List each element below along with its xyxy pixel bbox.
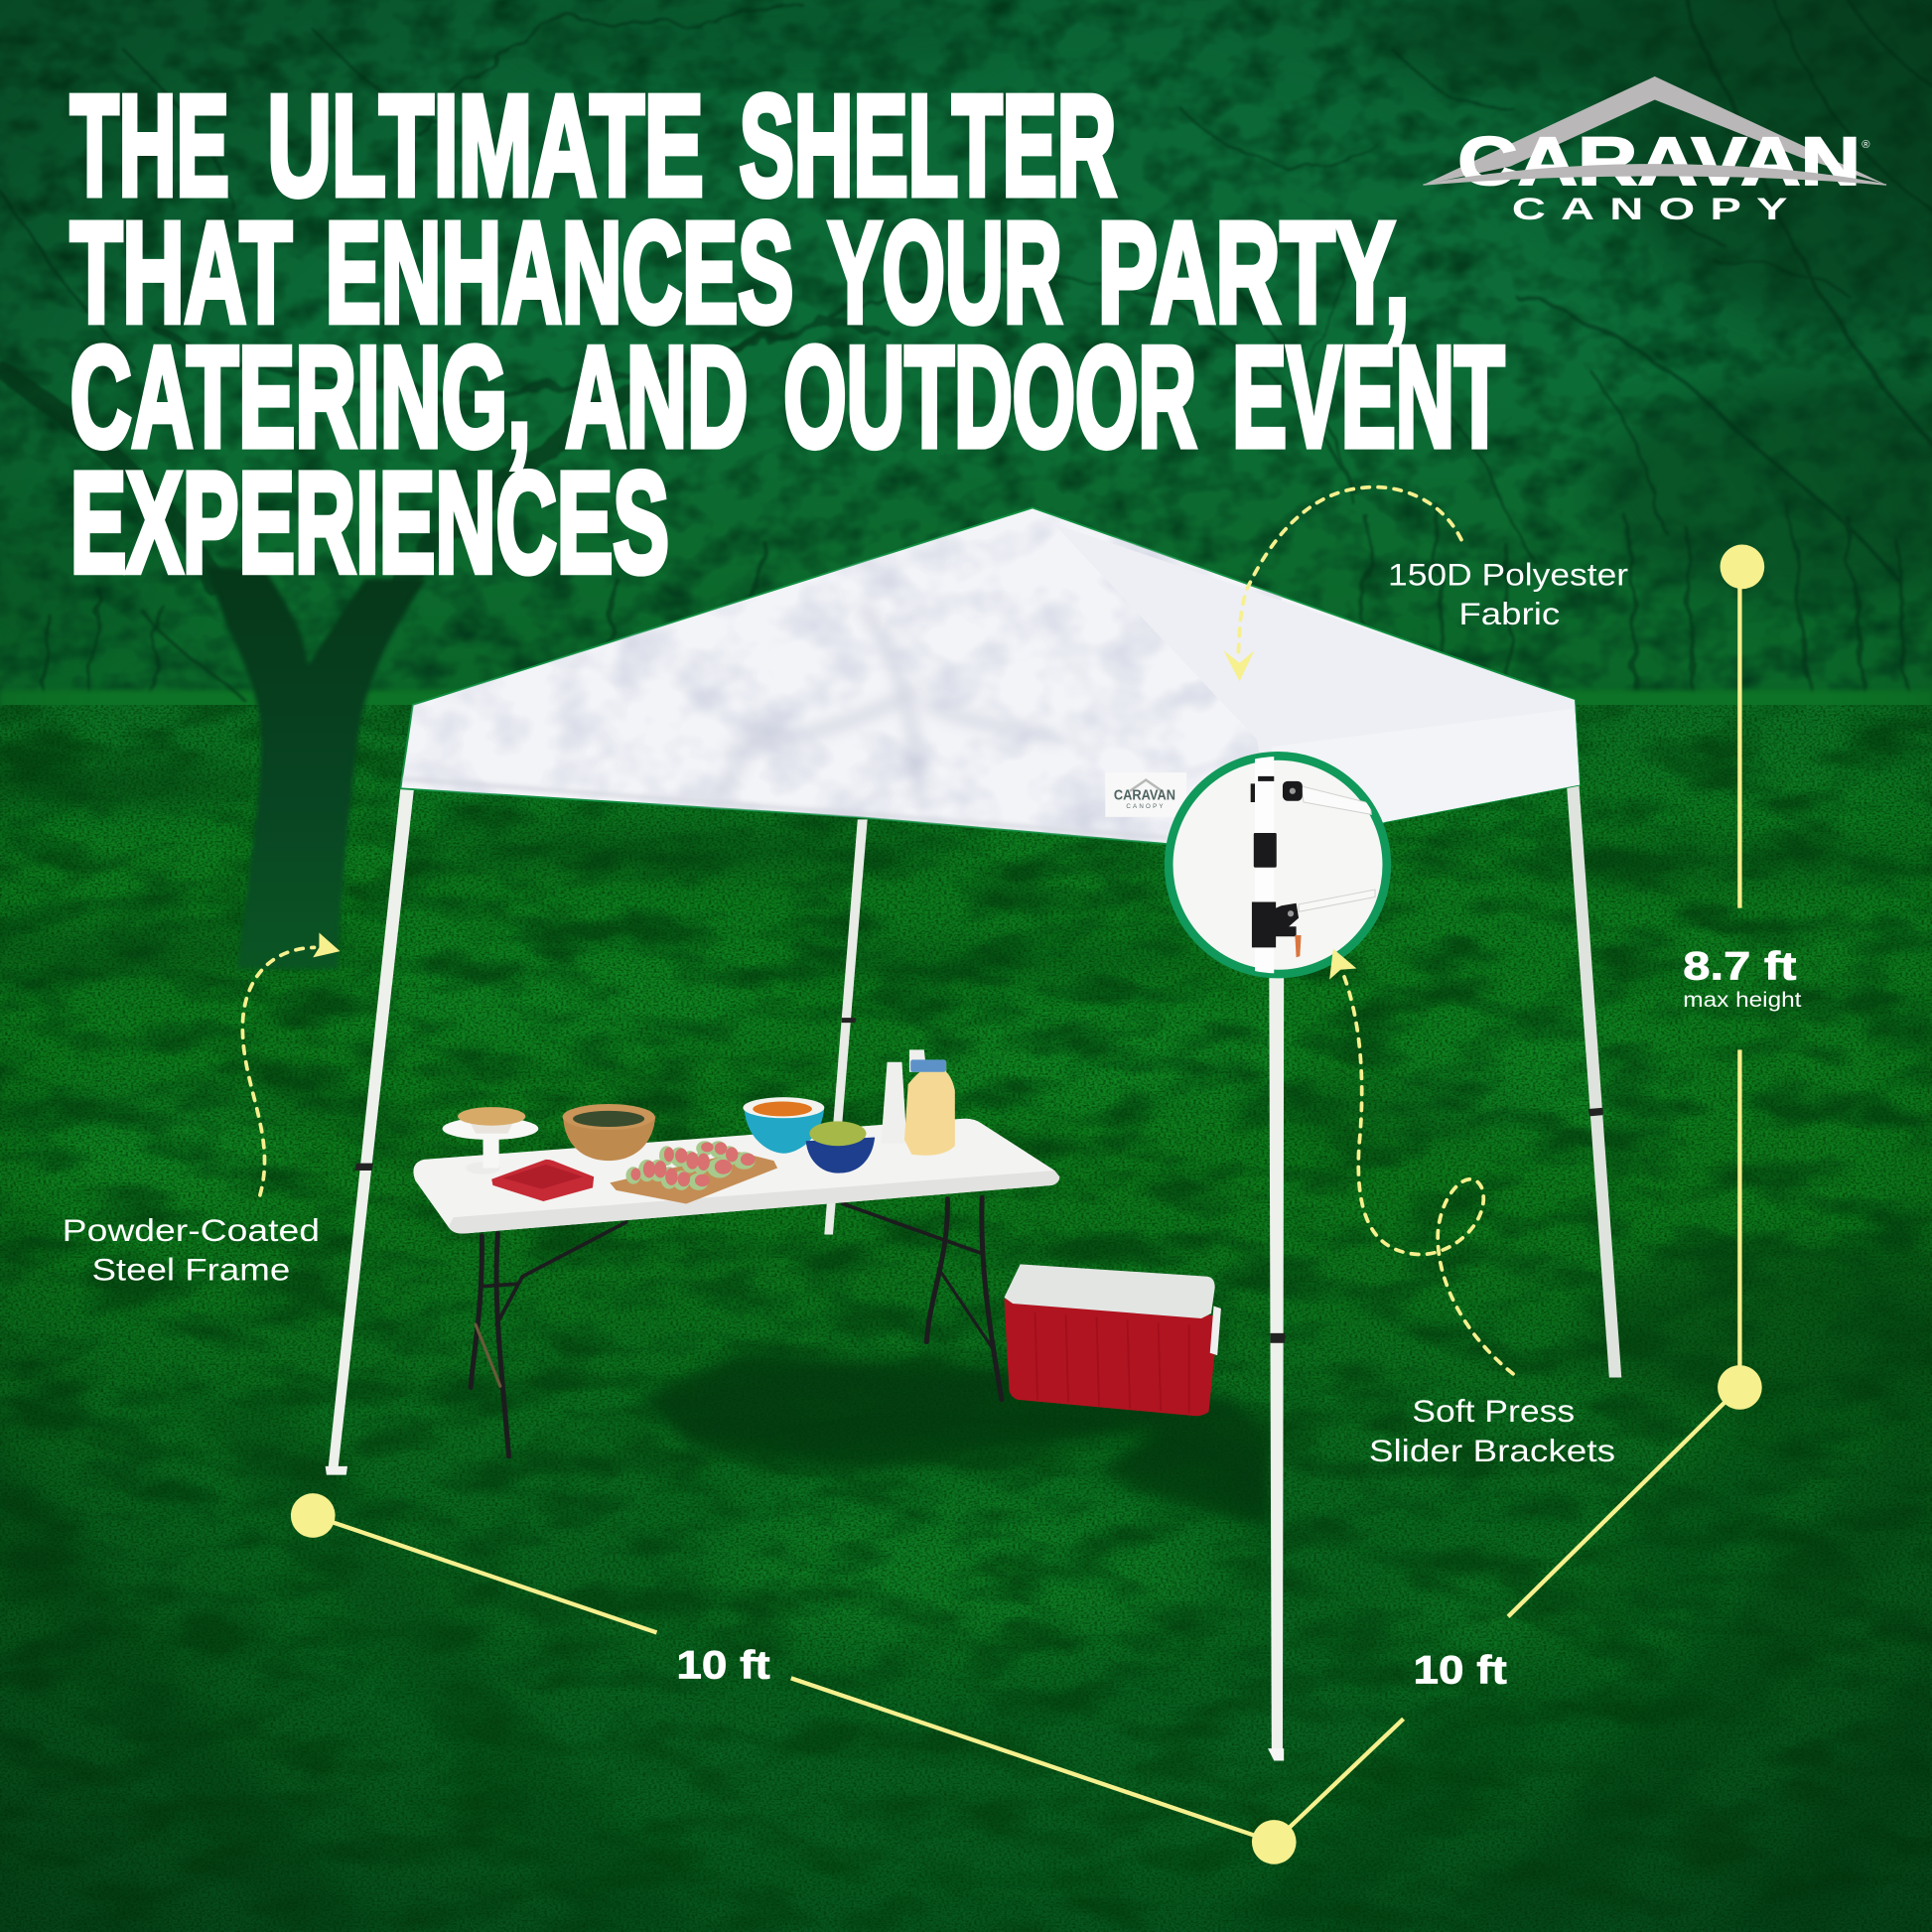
left front pole: [328, 788, 414, 1472]
width label right: 10 ft: [1414, 1648, 1507, 1692]
height bottom marker: [1718, 1365, 1762, 1410]
title: SHELTER: [740, 66, 1116, 225]
background: blurred forest: [0, 0, 1932, 740]
dimension line: right width: [1252, 1387, 1739, 1864]
tree trunk: [207, 567, 426, 968]
canopy valance: [1272, 709, 1580, 850]
background branches: [0, 0, 1932, 727]
red plates: [491, 1160, 594, 1201]
canopy roof: [400, 507, 1580, 850]
logo: Caravan Canopy: [1423, 76, 1886, 226]
dimension line: height: [1718, 545, 1764, 1410]
callout: frame: Powder-Coated: [63, 1213, 320, 1248]
height label: 8.7 ft: [1683, 945, 1796, 989]
callout: brackets: Soft Press: [1412, 1394, 1575, 1429]
title: AND: [566, 317, 748, 477]
stacked cups: [881, 1049, 926, 1144]
left corner marker: [291, 1493, 336, 1538]
cooler lid: [1004, 1264, 1215, 1318]
callout: frame: [63, 932, 341, 1287]
inset: slider bracket detail: [1169, 752, 1387, 986]
tree limbs: [0, 333, 788, 702]
inset upper knob: [1283, 781, 1303, 801]
arrow: fabric: [1223, 487, 1461, 681]
right pole: [1566, 776, 1621, 1378]
canopy dappled shade: [394, 505, 1282, 850]
cooler body: [1004, 1299, 1218, 1416]
logo swoosh: [1423, 165, 1886, 185]
cutting board: [610, 1152, 777, 1204]
callout: brackets: Slider Brackets: [1369, 1434, 1615, 1468]
canopy label tag: CANOPY: [1126, 803, 1164, 810]
grass shadow patches: [0, 772, 1932, 1417]
background: grass lawn: [0, 690, 1932, 1932]
title: CATERING,: [70, 317, 531, 477]
inset lower arm: [1299, 890, 1375, 911]
title: YOUR: [828, 193, 1062, 352]
cooler ribs: [1035, 1312, 1189, 1414]
logo sub-word: CANOPY: [1512, 192, 1803, 226]
table top: [413, 1119, 1058, 1233]
cake stand with pie: [443, 1107, 538, 1174]
blue fruit bowl: [743, 1097, 824, 1154]
red cooler: [1004, 1264, 1221, 1416]
front corner marker: [1252, 1820, 1297, 1864]
title: THE: [70, 66, 229, 225]
canopy label tag: CARAVAN: [1114, 787, 1175, 803]
front pole: [1269, 973, 1284, 1749]
sunlit grass patches: [49, 1038, 1639, 1690]
logo: Caravan Canopy: ®: [1862, 139, 1870, 151]
dimension line: left width: [291, 1493, 1274, 1842]
height top marker: [1721, 545, 1764, 589]
callout: brackets: [1329, 949, 1615, 1468]
title: [70, 66, 1504, 603]
title: PARTY,: [1098, 193, 1410, 352]
canopy label tag: [1105, 772, 1186, 817]
inset upper arm: [1302, 786, 1371, 814]
inset middle block: [1254, 833, 1277, 868]
inset pole: [1255, 752, 1274, 986]
callout: fabric: [1223, 487, 1628, 681]
table legs: [471, 1197, 1002, 1456]
title: EXPERIENCES: [70, 443, 669, 603]
title: OUTDOOR: [783, 317, 1196, 477]
width label left: 10 ft: [676, 1643, 770, 1687]
lemonade jar: [904, 1059, 955, 1156]
back pole: [824, 819, 868, 1235]
inset top bracket: [1251, 776, 1274, 802]
wooden salad bowl: [563, 1104, 655, 1161]
title: ULTIMATE: [267, 66, 704, 225]
canopy branch shadows: [715, 604, 1059, 801]
callout: frame: Steel Frame: [91, 1252, 290, 1287]
logo wordmark: CARAVAN: [1457, 124, 1861, 200]
arrow: frame: [242, 932, 341, 1195]
mown diagonal stripes: [0, 1399, 1928, 1921]
title: THAT: [70, 193, 292, 352]
arrow: brackets: [1329, 949, 1513, 1374]
large tree: [0, 333, 788, 968]
callout: fabric: Fabric: [1458, 597, 1560, 631]
logo roof: [1423, 76, 1886, 185]
title: ENHANCES: [326, 193, 793, 352]
folding table: [413, 1119, 1059, 1456]
food on table: [443, 1049, 955, 1204]
height label: max height: [1683, 989, 1802, 1012]
canopy right panel: [1053, 523, 1580, 850]
height label: [1683, 945, 1802, 1012]
table shadow on grass: [640, 1355, 1272, 1528]
watermelon slices: [625, 1141, 756, 1190]
dark tree canopy patches: [0, 0, 1932, 653]
inset orange pull tab: [1295, 935, 1302, 957]
callout: fabric: 150D Polyester: [1388, 558, 1628, 593]
canopy tent: [326, 505, 1621, 1760]
inset lower bracket: [1252, 901, 1299, 947]
title: EVENT: [1232, 317, 1504, 477]
navy grape bowl: [806, 1121, 875, 1173]
